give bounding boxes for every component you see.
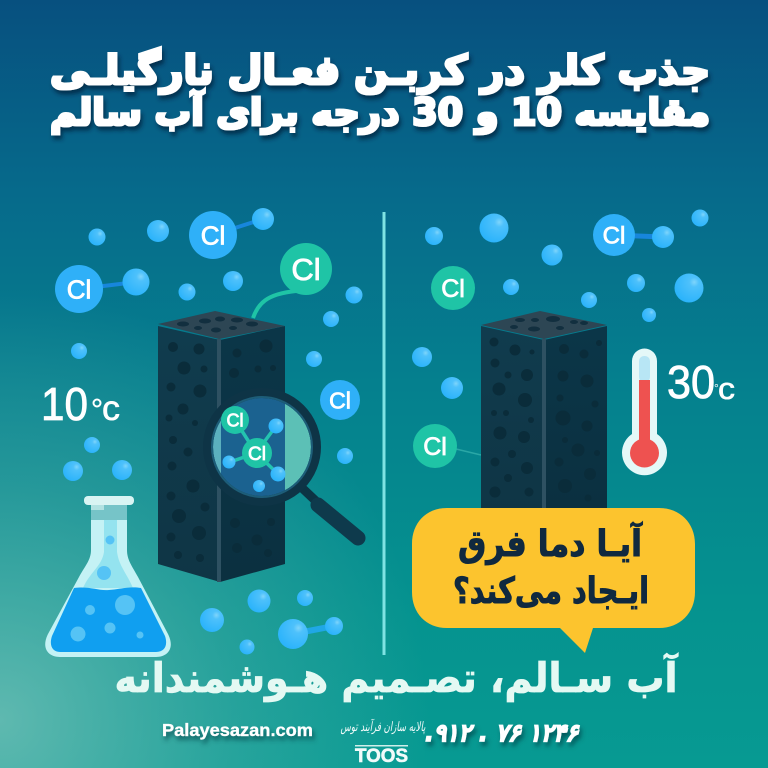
title line 1: جذب کلر در کربـن فعـال نارگیلـی xyxy=(50,47,710,94)
label: 30 degrees: c xyxy=(718,371,735,406)
molecule: Cl left xyxy=(55,265,150,313)
pores: faces xyxy=(490,338,602,502)
pores: top face xyxy=(177,316,258,332)
molecule: Cl teal with tail: Cl xyxy=(291,252,321,287)
label: 30 degrees: ° xyxy=(714,381,719,395)
label: 10 degrees: c xyxy=(102,389,120,428)
company name: پالایه سازان فرآیند توس xyxy=(340,718,426,735)
molecule: Cl teal with tail xyxy=(253,243,332,318)
molecule in lens: Cl xyxy=(248,444,266,465)
left carbon column xyxy=(158,311,285,582)
magnifying glass xyxy=(205,393,358,538)
callout: speech bubble xyxy=(412,508,695,653)
right carbon column xyxy=(481,311,607,512)
left molecules and bubbles xyxy=(55,208,362,654)
pores: top face xyxy=(510,316,588,332)
handle xyxy=(300,486,358,538)
molecule: Cl top xyxy=(189,208,274,259)
flask bubbles xyxy=(70,536,144,642)
molecule: Cl teal lower xyxy=(413,424,481,468)
molecule in lens: Cl xyxy=(226,410,244,430)
callout line 1: آیـا دما فرق xyxy=(458,521,643,565)
title xyxy=(50,47,710,134)
molecule: Cl right of column xyxy=(320,380,360,420)
slogan: آب سـالم، تصـمیم هـوشمندانه xyxy=(114,653,678,702)
molecule: Cl right of column: Cl xyxy=(329,388,351,414)
molecule: Cl teal lower: Cl xyxy=(423,433,447,461)
molecule: Cl blue right xyxy=(593,214,674,256)
right molecules and bubbles xyxy=(412,210,708,468)
divider xyxy=(382,212,386,655)
TOOS wordmark: TOOS xyxy=(355,746,408,767)
bubbles left xyxy=(63,220,362,654)
label: 10 degrees: 10 xyxy=(41,378,88,430)
molecule in lens xyxy=(221,406,286,492)
molecule: Cl teal upper: Cl xyxy=(441,275,465,303)
molecule: Cl teal upper xyxy=(431,266,475,310)
icon: thermometer xyxy=(622,348,667,475)
title line 2: مقایسه 10 و 30 درجه برای آب سالم xyxy=(50,89,710,134)
label: 30 degrees: 30 xyxy=(667,356,715,408)
bubbles right xyxy=(412,210,708,399)
molecule: Cl blue right: Cl xyxy=(603,222,625,250)
molecule: Cl left: Cl xyxy=(67,274,91,304)
label: 10 degrees xyxy=(41,378,120,430)
pores: faces xyxy=(166,340,276,562)
icon: flask xyxy=(45,496,171,657)
callout line 2: ایـجاد می‌کند؟ xyxy=(453,571,649,612)
logo: company xyxy=(340,718,426,767)
lens xyxy=(205,393,316,501)
website: Palayesazan.com xyxy=(162,720,313,740)
phone number: .۹۱۲ . ۷۶ ۱۲۴۶ xyxy=(425,719,580,747)
molecule: Cl top: Cl xyxy=(201,220,225,250)
